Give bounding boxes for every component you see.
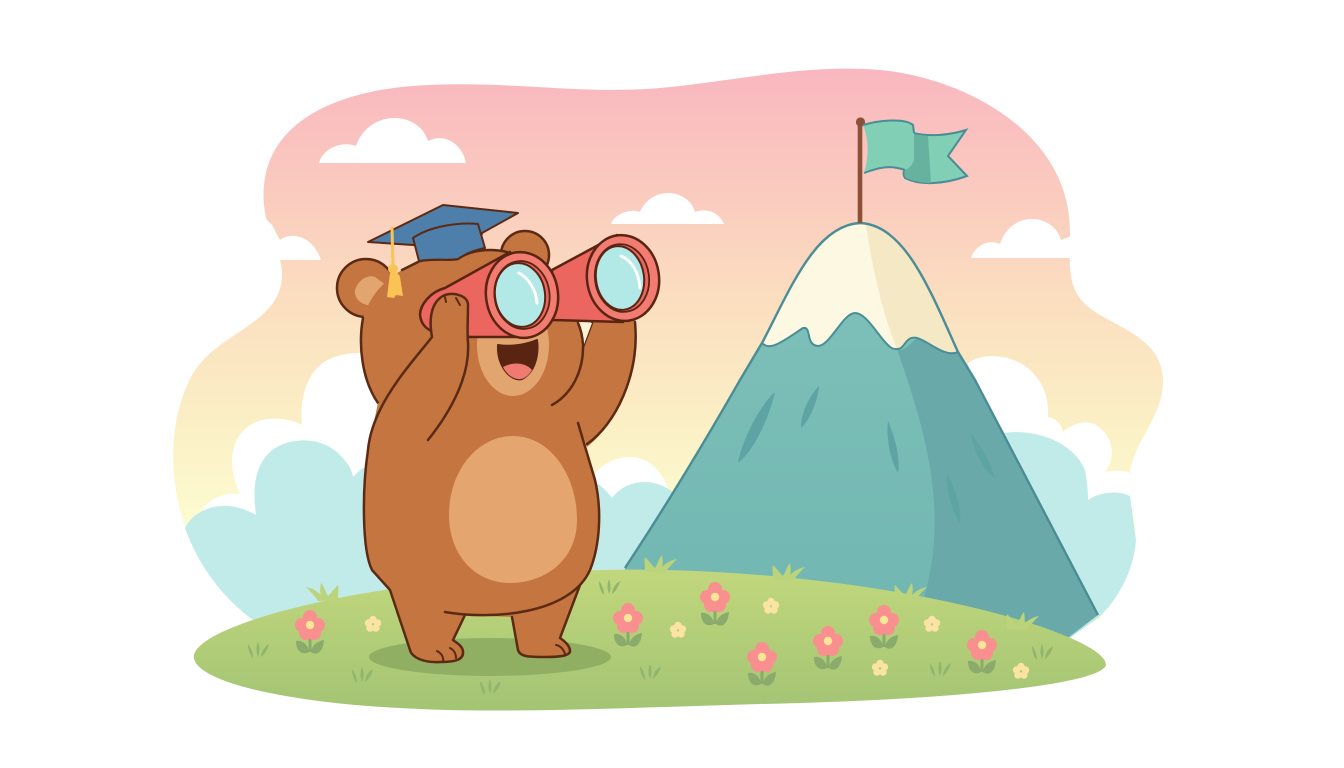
pink flowers [295, 582, 997, 686]
snow edge [762, 313, 958, 353]
left ear [337, 259, 395, 317]
hat board [368, 205, 518, 250]
right eyepiece inner rim [591, 241, 653, 315]
mountain [620, 223, 1098, 660]
right ear [501, 231, 549, 279]
left lens [491, 260, 549, 330]
cheek line [552, 323, 583, 405]
horizon grass tufts [306, 555, 1039, 630]
cloud: left edge [262, 215, 321, 260]
mouth [498, 340, 537, 379]
flag front edge [863, 120, 914, 173]
torso outline [364, 423, 599, 662]
pole ball [856, 117, 865, 127]
right barrel of binoculars [552, 235, 623, 322]
mountain shaded side [897, 336, 1098, 642]
tongue [503, 364, 532, 379]
left lens glare [519, 273, 537, 303]
rock streaks [738, 386, 994, 523]
paw fingers [445, 297, 460, 305]
mountain body [620, 223, 1098, 660]
mountain outline [625, 223, 1098, 615]
mortarboard hat [368, 205, 518, 298]
flag pole [858, 124, 862, 223]
small yellow flowers [365, 598, 1029, 679]
flag fold shadow [904, 134, 931, 183]
far arm [540, 320, 636, 447]
cloud: right of peak [971, 219, 1072, 258]
torso and legs [364, 400, 599, 662]
grassy hill [194, 570, 1106, 711]
hat band [413, 224, 485, 261]
left ear inner [355, 276, 386, 306]
large white clouds behind the bear [200, 353, 1136, 560]
snow shade [866, 224, 958, 353]
near arm with paw [368, 294, 468, 480]
flag front [863, 120, 914, 173]
tassel [387, 228, 403, 298]
bear [337, 205, 665, 662]
toes [437, 645, 565, 661]
right lens glare [621, 256, 640, 288]
flag tail [904, 130, 967, 183]
right eyepiece ring [581, 230, 665, 326]
left eyepiece ring [480, 247, 564, 343]
small grass marks [248, 579, 1053, 695]
belly patch [449, 436, 577, 583]
flag on the summit [856, 117, 967, 223]
left eyepiece inner rim [490, 258, 554, 332]
cloud: top centre [611, 193, 724, 224]
snow cap [762, 223, 958, 353]
right lens [592, 243, 648, 313]
bear ground shadow [369, 638, 611, 676]
left barrel of binoculars [420, 252, 530, 337]
muzzle [477, 294, 549, 396]
sky gap by far arm [581, 322, 592, 347]
cloud: top left [319, 118, 466, 163]
sky blob background [173, 69, 1163, 625]
head [361, 250, 582, 440]
pale blue cloud bank [185, 432, 1136, 645]
